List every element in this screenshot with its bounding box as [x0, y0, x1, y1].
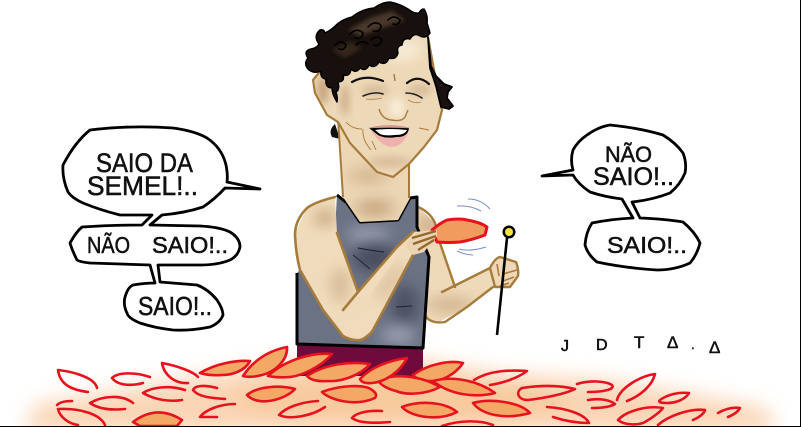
head — [313, 35, 442, 177]
text: nao: NÃO — [87, 232, 130, 258]
leaves: orange filled — [133, 347, 530, 426]
eyebrows — [352, 78, 429, 84]
nose — [379, 74, 408, 121]
artist signature: Δ — [667, 333, 678, 352]
background glow under leaves — [24, 360, 778, 427]
text: saio: SAIO!.. — [152, 232, 228, 258]
ear and face — [313, 35, 442, 177]
face shading — [317, 40, 432, 167]
brown highlights — [348, 11, 405, 36]
fingers on fan — [405, 230, 437, 255]
artist signature: Δ — [709, 338, 720, 357]
mid-tone highlight — [332, 42, 362, 58]
tank top — [297, 195, 429, 348]
stick with yellow tip — [497, 226, 516, 335]
face outline — [313, 37, 442, 177]
left arm — [295, 197, 437, 340]
curly hair — [306, 2, 453, 109]
artist signature: J — [561, 338, 569, 355]
bubble outline — [63, 127, 260, 330]
leaves: open outlines — [57, 363, 740, 426]
text: saio lower: SAIO!.. — [138, 291, 212, 321]
artist signature: T — [634, 333, 644, 352]
character — [295, 2, 518, 376]
maroon trousers — [297, 344, 423, 376]
lower lip — [371, 130, 409, 147]
mouth and teeth — [369, 126, 409, 138]
text: saio: SAIO!.. — [607, 232, 687, 258]
hair right side — [428, 37, 453, 109]
text: saio da semel: SAIO DA — [96, 148, 193, 178]
closed eyes — [363, 93, 422, 98]
artist signature: D — [596, 337, 608, 354]
leaf pile — [57, 347, 740, 426]
laugh lines — [346, 122, 429, 150]
speech bubbles right: SAIO!.. — [593, 163, 674, 191]
neck — [338, 118, 410, 222]
speech bubbles left: SEMEL!.. — [87, 171, 198, 201]
bubble outline — [542, 125, 700, 270]
text: nao saio: NÃO — [605, 142, 652, 167]
right arm — [417, 207, 493, 323]
speech bubbles left — [63, 127, 260, 330]
hand holding stick — [490, 257, 518, 287]
artist signature: . — [691, 337, 695, 352]
curl strokes — [335, 17, 400, 50]
hair behind the neck — [331, 124, 340, 139]
artist signature — [561, 333, 720, 357]
hair mass — [306, 2, 430, 102]
upper lip — [369, 126, 409, 128]
red fan held in hand — [432, 219, 487, 242]
speech bubbles right — [542, 125, 700, 270]
motion lines — [457, 199, 490, 255]
